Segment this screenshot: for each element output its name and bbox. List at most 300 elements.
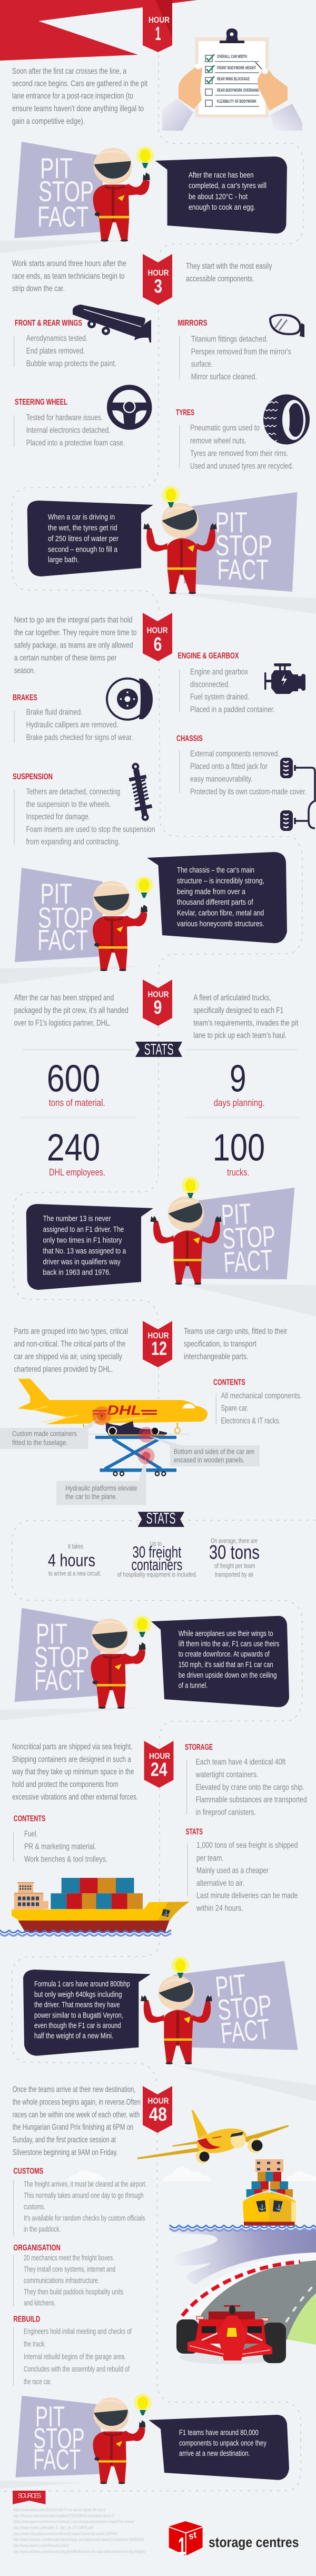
hour 6 badge bbox=[143, 613, 172, 661]
heading: pit stop fact: FACT bbox=[37, 924, 88, 956]
speech bubble with fact: large bath. bbox=[48, 555, 79, 564]
intro text bbox=[12, 67, 148, 126]
hour 24 left text: Noncritical parts are shipped via sea freight. bbox=[12, 1742, 133, 1751]
icon: chassis bbox=[280, 758, 315, 831]
hour 9 right text: lane to pick up each team's haul. bbox=[193, 1031, 287, 1040]
icon: mirror bbox=[269, 314, 304, 337]
heading: pit stop fact bbox=[37, 877, 93, 956]
block: customs: in the paddock. bbox=[24, 2226, 61, 2234]
block: engine and gearbox: Engine and gearbox bbox=[190, 668, 248, 677]
red top banner with hour 1 badge: HOUR bbox=[149, 16, 170, 25]
block: brakes: Brake pads checked for signs of wear. bbox=[26, 733, 133, 742]
speech bubble with fact: thousand different parts of bbox=[177, 898, 253, 907]
heading: pit stop fact: FACT bbox=[217, 553, 269, 586]
stat: 100 trucks: 100 bbox=[213, 1127, 265, 1169]
hour 9 badge bbox=[143, 980, 172, 1026]
illustration: container ship front view: ⚓ bbox=[259, 2204, 266, 2211]
section: hour 3 bbox=[12, 254, 310, 471]
intro text: Soon after the first car crosses the line, a bbox=[12, 67, 126, 76]
block: sea stats: STATS bbox=[185, 1827, 203, 1836]
speech bubble with fact: 150 mph, it's said that an F1 car can bbox=[179, 1660, 273, 1669]
icon: brake disc bbox=[107, 679, 153, 720]
speech bubble with fact: enough to cook an egg. bbox=[189, 203, 255, 212]
heading: pit stop fact: PIT bbox=[36, 1617, 67, 1650]
hour 12 right text bbox=[184, 1327, 287, 1361]
stat: 30 freight containers: of hospitality equipment is included. bbox=[117, 1571, 197, 1579]
panel: pit stop fact 7 bbox=[0, 2394, 289, 2489]
block: sea stats: Mainly used as a cheaper bbox=[196, 1866, 269, 1875]
block: organisation bbox=[13, 2244, 123, 2308]
hour 12 left text: and non-critical. The critical parts of the bbox=[14, 1340, 125, 1349]
source links bbox=[13, 2507, 146, 2554]
block: air freight contents: Spare car. bbox=[221, 1404, 249, 1413]
icon: clipboard checklist held by hands bbox=[162, 28, 302, 131]
hour 6 left text: safely package, as teams are only allowed bbox=[14, 641, 133, 650]
speech bubble with fact: to create downforce. At upwards of bbox=[179, 1650, 270, 1659]
block: storage: STORAGE bbox=[185, 1743, 213, 1752]
lavender backdrop bbox=[15, 868, 103, 962]
block: mirrors: surface. bbox=[191, 360, 213, 369]
block: rebuild: the track. bbox=[24, 2340, 46, 2348]
panel: pit stop fact 5 bbox=[0, 1608, 289, 1720]
heading: pit stop fact: FACT bbox=[34, 1663, 84, 1696]
floor shadow bbox=[0, 1708, 139, 1720]
callout: wooden panels: encased in wooden panels. bbox=[174, 1456, 244, 1464]
block: steering wheel: Placed into a protective foam case. bbox=[26, 439, 125, 448]
hour 9 left text bbox=[14, 994, 129, 1028]
callout: custom made containers: fitted to the fuselage. bbox=[12, 1438, 68, 1446]
floor shadow bbox=[181, 1284, 316, 1316]
intro text: second race begins. Cars are gathered in the pit bbox=[12, 79, 148, 89]
panel: pit stop fact 6 bbox=[23, 1956, 316, 2101]
block: chassis bbox=[176, 734, 307, 796]
section: hour 6 bbox=[13, 613, 315, 847]
block: organisation: 20 mechanics meet the freight boxes. bbox=[24, 2254, 114, 2262]
block: rebuild: REBUILD bbox=[13, 2315, 40, 2324]
intro text: ensure teams haven't done anything illegal to bbox=[12, 104, 144, 113]
block: chassis: easy manoeuvrability. bbox=[190, 775, 253, 783]
block: mirrors: Mirror surface cleaned. bbox=[191, 373, 257, 381]
panel: pit stop fact 4 bbox=[26, 1177, 316, 1316]
block: organisation: They then build paddock hospitality units bbox=[24, 2288, 123, 2296]
floor shadow bbox=[0, 240, 126, 253]
hour 3 left text: Work starts around three hours after the bbox=[12, 259, 126, 268]
stats banner bbox=[21, 1041, 299, 1118]
hour 24 left text bbox=[12, 1742, 138, 1801]
stat: 240 employees: 240 bbox=[47, 1127, 100, 1169]
block: tyres: Pneumatic guns used to bbox=[190, 424, 260, 433]
stat: 4 hours: It takes bbox=[68, 1543, 83, 1550]
hour 3 left text bbox=[12, 259, 126, 293]
heading: pit stop fact bbox=[37, 152, 94, 233]
stat: 9 days: 9 bbox=[230, 1058, 246, 1100]
hour 3 right text: They start with the most easily bbox=[186, 262, 272, 271]
callout: custom made containers: Custom made containers bbox=[12, 1430, 77, 1438]
speech bubble with fact: F1 teams have around 80,000 bbox=[179, 2428, 259, 2437]
heading: pit stop fact: STOP bbox=[215, 529, 272, 562]
callout: hydraulic platforms: the car to the plane. bbox=[65, 1493, 117, 1501]
speech bubble with fact: even though the F1 car is around bbox=[34, 2021, 121, 2030]
source links: https://www.thoughtco.com/how-formula1-teams-travel-the-world-1347446 bbox=[13, 2531, 117, 2536]
block: brakes bbox=[13, 693, 133, 743]
stat: 30 tons: On average, there are bbox=[211, 1537, 258, 1544]
heading: pit stop fact: PIT bbox=[215, 506, 248, 538]
source links: https://www.wired.com/2014/11/ship-f1-car-across-globe-36-hours/ bbox=[13, 2507, 106, 2512]
hour 24 left text: excessive vibrations and other external forces. bbox=[12, 1793, 138, 1801]
hour 6 left text: season. bbox=[14, 666, 35, 675]
speech bubble with fact: the wet, the tyres get rid bbox=[48, 524, 117, 533]
block: tyres: Tyres are removed from their rims. bbox=[190, 449, 288, 458]
heading: pit stop fact bbox=[215, 506, 272, 586]
block: suspension: the suspension to the wheels. bbox=[26, 800, 111, 809]
speech bubble with fact bbox=[149, 2415, 289, 2480]
block: engine and gearbox bbox=[178, 651, 275, 714]
hour 12 right text: interchangeable parts. bbox=[184, 1352, 249, 1361]
lavender backdrop bbox=[16, 2396, 108, 2477]
heading: pit stop fact: FACT bbox=[37, 200, 88, 233]
source links: http://www.atlasf1.com/ref/scrutiny.html/ bbox=[13, 2543, 70, 2548]
floor shadow bbox=[0, 966, 141, 984]
source links: http://www.mclaren.com/formula1/blog/thefifthdriver/on-the-road-with-mclaren-moving-heights/ bbox=[13, 2549, 146, 2554]
speech bubble with fact bbox=[155, 156, 287, 233]
icon: suspension shock bbox=[126, 761, 154, 822]
section: hour 48 bbox=[13, 2085, 316, 2386]
hour 6 left text bbox=[14, 616, 136, 675]
heading: pit stop fact: PIT bbox=[220, 1197, 252, 1231]
panel: air freight stats bbox=[48, 1510, 260, 1579]
callout: wooden panels: Bottom and sides of the car are bbox=[174, 1447, 254, 1455]
hour 48 left text: Silverstone beginning at 9AM on Friday. bbox=[13, 2148, 118, 2157]
hour 9 badge: HOUR bbox=[147, 990, 169, 999]
block: suspension: SUSPENSION bbox=[13, 772, 53, 781]
source links: http://f1pulse.com/scharroder/insights/20110308/15-cool-facts-about-f1 bbox=[13, 2513, 114, 2518]
hour 9 left text: packaged by the pit crew, it's all handed bbox=[14, 1006, 129, 1015]
block: storage: in fireproof canisters. bbox=[196, 1808, 256, 1817]
block: steering wheel: STEERING WHEEL bbox=[15, 398, 67, 407]
illustration: F1 car on hydraulic lift bbox=[95, 1421, 176, 1476]
hour 9 right text: specifically designed to each F1 bbox=[193, 1006, 283, 1015]
floor shadow bbox=[171, 2064, 316, 2101]
block: air freight contents bbox=[213, 1378, 302, 1425]
stat: 600 tons: 600 bbox=[47, 1058, 100, 1100]
stat: 4 hours: to arrive at a new circuit. bbox=[48, 1570, 101, 1578]
block: sea freight contents: Fuel. bbox=[24, 1830, 38, 1839]
stat: 100 trucks: trucks. bbox=[227, 1167, 250, 1178]
heading: pit stop fact: FACT bbox=[223, 1243, 273, 1279]
illustration: container ship side view bbox=[0, 1878, 190, 1937]
heading: pit stop fact: FACT bbox=[219, 2012, 271, 2050]
block: suspension: from expanding and contracting. bbox=[26, 838, 120, 847]
source links: http://www.mclaren.com/formula1/team/things-you-didnt-know-about-f1-roadshow-46666558/ bbox=[13, 2537, 145, 2542]
illustration: container ship front view: ⚓ bbox=[275, 2204, 283, 2211]
speech bubble with fact: power similar to a Bugatti Veyron, bbox=[34, 2011, 123, 2020]
stat: 9 days bbox=[214, 1058, 265, 1108]
illustration: DHL cargo plane: DHL bbox=[107, 1403, 141, 1418]
hour 3 badge: HOUR bbox=[147, 269, 169, 278]
section: hour 24 bbox=[0, 1741, 307, 1937]
heading: pit stop fact: STOP bbox=[34, 1640, 90, 1673]
block: brakes: Hydraulic callipers are removed. bbox=[26, 721, 118, 730]
stats banner: STATS bbox=[144, 1041, 174, 1059]
block: storage: watertight containers. bbox=[195, 1770, 259, 1779]
logo: 1st storage centres: st bbox=[187, 2530, 199, 2542]
block: sea stats: within 24 hours. bbox=[196, 1904, 243, 1913]
illustration: road sweep background bbox=[169, 2224, 316, 2284]
speech bubble with fact: of 250 litres of water per bbox=[48, 534, 118, 543]
speech bubble with fact: completed, a car's tyres will bbox=[189, 181, 266, 190]
block: suspension: Foam inserts are used to stop the suspension bbox=[26, 825, 155, 834]
block: customs: This normally takes around one day to go through bbox=[24, 2192, 144, 2200]
icon: clipboard checklist held by hands: FRONT BODYWORK HEIGHT bbox=[217, 66, 256, 71]
speech bubble with fact: lift them into the air, F1 cars use theirs bbox=[179, 1639, 279, 1648]
block: organisation: They install core systems, internet and bbox=[24, 2266, 115, 2274]
block: brakes: BRAKES bbox=[13, 693, 37, 702]
block: customs: The freight arrives, it must be cleared at the airport. bbox=[24, 2180, 146, 2189]
section: hour 1 bbox=[0, 0, 302, 131]
stat: 30 freight containers bbox=[117, 1540, 197, 1579]
section: hour 12 bbox=[0, 1321, 302, 1505]
block: brakes: Brake fluid drained. bbox=[26, 708, 83, 717]
hour 12 left text: car are shipped via air, using specially bbox=[14, 1352, 122, 1361]
stats banner bbox=[137, 1510, 184, 1527]
speech bubble with fact bbox=[27, 501, 153, 576]
block: storage bbox=[185, 1743, 307, 1817]
speech bubble with fact: only two times in F1 history bbox=[43, 1236, 122, 1245]
hour 48 badge: 48 bbox=[149, 2103, 167, 2125]
block: storage: Each team have 4 identical 40ft bbox=[196, 1758, 286, 1767]
hour 9 left text: over to F1's logistics partner, DHL. bbox=[14, 1019, 111, 1028]
hour 24 badge: HOUR bbox=[149, 1752, 170, 1761]
icon: clipboard checklist held by hands: REAR BODYWORK OVERHANG bbox=[217, 88, 259, 93]
speech bubble with fact: that No. 13 was assigned to a bbox=[43, 1247, 126, 1256]
hour 6 badge: HOUR bbox=[147, 626, 168, 635]
callout: wooden panels bbox=[138, 1427, 260, 1466]
speech bubble with fact: of a tunnel. bbox=[179, 1681, 208, 1690]
stat: 4 hours bbox=[48, 1543, 101, 1578]
speech bubble with fact: half the weight of a new Mini. bbox=[34, 2032, 113, 2041]
stat: 30 freight containers: containers bbox=[132, 1555, 182, 1574]
block: rebuild: Concludes with the assembly and rebuild of bbox=[24, 2365, 130, 2374]
heading: pit stop fact: STOP bbox=[38, 175, 94, 208]
driver with light bulb bbox=[150, 1177, 222, 1285]
source links: http://www.mydhl.tu/files/dhl_f1_fact_sh_97713875.pdf bbox=[13, 2525, 93, 2530]
icon: tyre bbox=[263, 394, 310, 445]
speech bubble with fact: be driven upside down on the ceiling bbox=[179, 1671, 277, 1680]
stats banner: STATS bbox=[146, 1510, 176, 1527]
hour 12 right text: specification, to transport bbox=[184, 1340, 256, 1349]
driver with light bulb bbox=[93, 876, 153, 971]
hour 9 right text bbox=[193, 994, 299, 1040]
block: rebuild: Internal rebuild begins of the garage area. bbox=[24, 2353, 126, 2361]
logo: 1st storage centres bbox=[169, 2521, 299, 2560]
speech bubble with fact: After the race has been bbox=[189, 171, 254, 180]
hour 6 badge: 6 bbox=[154, 633, 162, 655]
speech bubble with fact bbox=[23, 1970, 151, 2056]
hour 3 badge: 3 bbox=[154, 276, 162, 297]
block: steering wheel: Internal electronics detached. bbox=[26, 426, 111, 435]
red top banner with hour 1 badge: 1 bbox=[155, 23, 161, 44]
hour 12 left text: chartered planes provided by DHL. bbox=[14, 1365, 113, 1374]
block: sea freight contents: PR & marketing material. bbox=[24, 1842, 96, 1851]
hour 12 badge: 12 bbox=[151, 1338, 167, 1359]
block: front and rear wings: Bubble wrap protects the paint. bbox=[26, 359, 116, 368]
stat: 240 employees: DHL employees. bbox=[49, 1167, 105, 1178]
block: chassis: CHASSIS bbox=[176, 734, 203, 743]
block: front and rear wings: FRONT & REAR WINGS bbox=[15, 319, 82, 328]
hour 6 left text: a certain number of these items per bbox=[14, 653, 116, 662]
hour 48 left text bbox=[13, 2085, 141, 2157]
callout: hydraulic platforms bbox=[56, 1447, 155, 1505]
hour 12 left text bbox=[14, 1327, 128, 1374]
source links: https://www.quora.com/How-are-Formula-1-cars-transported-between-Grand-Prix-venues bbox=[13, 2519, 135, 2524]
block: mirrors: Titanium fittings detached. bbox=[191, 335, 268, 344]
block: mirrors: Perspex removed from the mirror's bbox=[191, 347, 291, 356]
icon: steering wheel bbox=[110, 387, 150, 427]
heading: pit stop fact: STOP bbox=[216, 1989, 273, 2026]
speech bubble with fact: When a car is driving in bbox=[48, 513, 115, 522]
speech bubble with fact: driver was in qualifiers way bbox=[43, 1257, 121, 1266]
speech bubble with fact bbox=[26, 1204, 153, 1290]
floor shadow bbox=[165, 592, 316, 614]
speech bubble with fact: arrive at a new destination. bbox=[179, 2449, 250, 2458]
block: sea freight contents: Work benches & tool trolleys. bbox=[24, 1855, 107, 1864]
block: mirrors: MIRRORS bbox=[178, 319, 208, 328]
speech bubble with fact: Kevlar, carbon fibre, metal and bbox=[177, 909, 264, 918]
speech bubble with fact: the driver. That means they have bbox=[34, 2000, 120, 2009]
block: front and rear wings: End plates removed. bbox=[26, 347, 85, 356]
stat: 30 freight containers: 30 freight bbox=[132, 1543, 182, 1561]
driver with light bulb bbox=[91, 1615, 151, 1709]
heading: pit stop fact: PIT bbox=[40, 877, 72, 910]
block: sea stats: per team. bbox=[196, 1854, 224, 1863]
hour 6 left text: the car together. They require more time to bbox=[14, 629, 136, 638]
illustration: clouds bbox=[68, 2167, 316, 2181]
illustration: red F1 car bbox=[176, 2305, 286, 2364]
hour 3 right text: accessible components. bbox=[186, 275, 254, 283]
hour 12 left text: Parts are grouped into two types, critical bbox=[14, 1327, 128, 1336]
block: front and rear wings bbox=[14, 319, 116, 368]
block: steering wheel: Tested for hardware issues. bbox=[26, 414, 103, 423]
hour 48 left text: the whole process begins again, in reverse.Often bbox=[13, 2098, 141, 2107]
block: sea stats bbox=[185, 1827, 298, 1913]
speech bubble with fact: While aeroplanes use their wings to bbox=[179, 1629, 273, 1638]
hour 48 left text: Sunday, and the first practice session at bbox=[13, 2136, 116, 2144]
icon: clipboard checklist held by hands: OVERALL CAR WIDTH bbox=[217, 54, 247, 59]
block: front and rear wings: Aerodynamics tested. bbox=[26, 334, 87, 343]
block: steering wheel bbox=[14, 398, 125, 448]
block: sea freight contents: CONTENTS bbox=[14, 1815, 45, 1824]
hour 24 left text: hold and protect the components from bbox=[12, 1780, 118, 1789]
block: sea freight contents bbox=[13, 1815, 107, 1864]
icon: engine bbox=[264, 663, 305, 694]
block: rebuild bbox=[13, 2315, 132, 2386]
block: engine and gearbox: disconnected. bbox=[190, 680, 230, 689]
heading: pit stop fact: PIT bbox=[40, 152, 73, 184]
hour 9 badge: 9 bbox=[154, 996, 162, 1018]
illustration: container ship side view: ⚓ bbox=[163, 1910, 169, 1916]
speech bubble with fact: Formula 1 cars have around 800bhp bbox=[34, 1980, 130, 1989]
callout: hydraulic platforms: Hydraulic platforms elevate bbox=[65, 1484, 137, 1492]
heading: pit stop fact: FACT bbox=[33, 2443, 81, 2476]
stat: 30 freight containers: Up to bbox=[150, 1540, 162, 1547]
sources ribbon: SOURCES bbox=[18, 2492, 41, 2500]
speech bubble with fact: components to unpack once they bbox=[179, 2439, 266, 2448]
intro text: lane entrance for a post-race inspection (to bbox=[12, 92, 133, 101]
illustration: DHL plane front view bbox=[137, 2110, 289, 2163]
intro text: gain a competitive edge). bbox=[12, 117, 85, 126]
lavender backdrop bbox=[14, 142, 103, 238]
heading: pit stop fact bbox=[33, 2400, 85, 2476]
section: hour 9 bbox=[14, 980, 299, 1040]
hour 6 left text: Next to go are the integral parts that hold bbox=[14, 616, 132, 625]
hour 3 left text: race ends, as team technicians begin to bbox=[12, 272, 124, 281]
hour 48 left text: Once the teams arrive at their new destination, bbox=[13, 2085, 136, 2094]
logo: 1st storage centres: storage centres bbox=[209, 2534, 299, 2550]
speech bubble with fact: be about 120°C - hot bbox=[189, 192, 248, 201]
panel: road stats bbox=[21, 1041, 299, 1178]
block: mirrors bbox=[178, 319, 291, 381]
stat: 4 hours: 4 hours bbox=[48, 1551, 95, 1570]
speech bubble with fact: The number 13 is never bbox=[43, 1214, 111, 1223]
block: organisation: ORGANISATION bbox=[13, 2244, 61, 2252]
stat: 30 tons bbox=[209, 1537, 260, 1579]
hour 24 badge: 24 bbox=[151, 1759, 167, 1780]
block: air freight contents: Electronics & IT racks. bbox=[221, 1416, 281, 1425]
driver with light bulb bbox=[93, 146, 154, 242]
stat: 30 tons: of freight per team bbox=[214, 1562, 255, 1570]
panel: pit stop fact 1 bbox=[0, 142, 287, 253]
hour 3 right text bbox=[186, 262, 272, 283]
sources ribbon bbox=[13, 2491, 45, 2504]
hour 48 badge: HOUR bbox=[147, 2097, 169, 2106]
lavender backdrop bbox=[173, 1961, 298, 2050]
heading: pit stop fact: STOP bbox=[38, 902, 93, 934]
block: organisation: and kitchens. bbox=[24, 2299, 56, 2308]
block: tyres: remove wheel nuts. bbox=[190, 437, 246, 446]
illustration: container ship front view bbox=[243, 2159, 296, 2226]
logo: 1st storage centres: 1 bbox=[178, 2532, 186, 2560]
heading: pit stop fact: STOP bbox=[221, 1219, 276, 1255]
hour 48 left text: races can be within one week of each other, with bbox=[13, 2110, 140, 2119]
speech bubble with fact: assigned to an F1 driver. The bbox=[43, 1225, 124, 1234]
speech bubble with fact bbox=[151, 1616, 289, 1707]
icon: clipboard checklist held by hands: REAR WING BLOCKAGE bbox=[217, 77, 250, 82]
block: chassis: Placed onto a fitted jack for bbox=[190, 762, 268, 771]
red top banner with hour 1 badge bbox=[0, 0, 197, 61]
block: customs: It's available for random checks by custom officials bbox=[24, 2214, 145, 2222]
block: engine and gearbox: Fuel system drained. bbox=[190, 693, 250, 702]
block: suspension: Tethers are detached, connecting bbox=[26, 787, 120, 796]
heading: pit stop fact bbox=[214, 1968, 273, 2050]
sources bbox=[13, 2491, 146, 2554]
block: organisation: communications infrastructure. bbox=[24, 2277, 99, 2285]
block: tyres bbox=[176, 408, 293, 471]
speech bubble with fact: second – enough to fill a bbox=[48, 545, 118, 554]
stat: 30 tons: transported by air bbox=[215, 1571, 254, 1579]
block: sea stats: alternative to air. bbox=[196, 1879, 244, 1888]
heading: pit stop fact bbox=[220, 1197, 276, 1279]
panel: pit stop fact 2 bbox=[27, 486, 316, 614]
hour 3 badge bbox=[143, 254, 172, 305]
stat: 600 tons: tons of material. bbox=[49, 1098, 105, 1108]
heading: pit stop fact: STOP bbox=[33, 2422, 85, 2455]
driver with light bulb bbox=[143, 486, 217, 594]
driver with light bulb bbox=[141, 1956, 212, 2064]
block: tyres: TYRES bbox=[176, 408, 194, 417]
block: rebuild: the race car. bbox=[24, 2378, 52, 2386]
icon: rear wing bbox=[73, 305, 151, 342]
block: chassis: External components removed. bbox=[190, 750, 280, 759]
